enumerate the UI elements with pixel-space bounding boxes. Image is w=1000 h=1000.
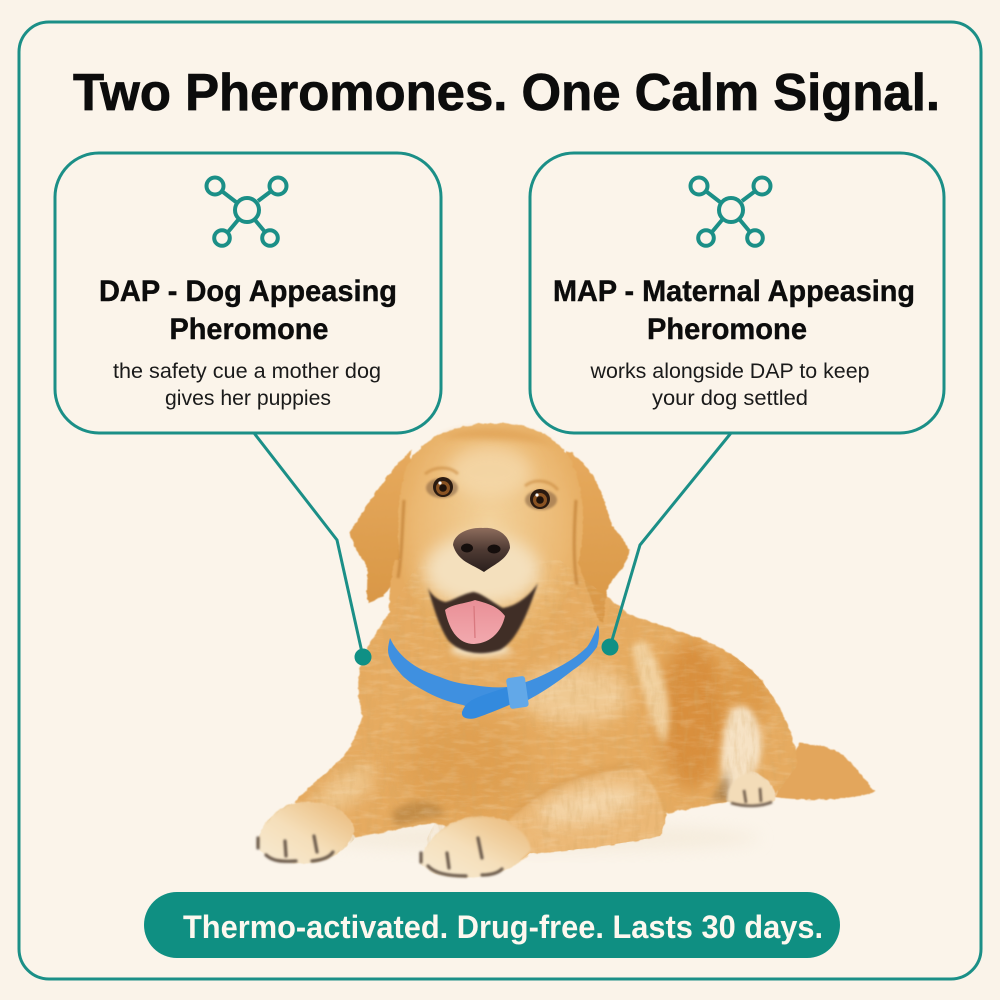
head — [398, 423, 583, 660]
rear paw redraw — [728, 773, 774, 805]
title: Two Pheromones. One Calm Signal. — [73, 64, 940, 122]
near leg — [505, 768, 665, 866]
rear leg shadow — [712, 770, 732, 802]
right eye — [525, 489, 557, 510]
near leg highlight — [536, 779, 644, 831]
floor shadow — [320, 824, 760, 852]
description: works alongside DAP to keep — [589, 360, 870, 383]
fur texture — [258, 618, 789, 874]
far leg highlight — [312, 762, 378, 814]
brows — [425, 468, 558, 490]
panel: MAP — [530, 153, 944, 433]
front left paw redraw — [258, 803, 353, 863]
heading: MAP - Maternal Appeasing — [553, 275, 915, 308]
rear paw toes — [731, 788, 772, 806]
heading: DAP - Dog Appeasing — [99, 275, 397, 308]
icon: molecule — [690, 178, 770, 246]
flank light patch — [721, 706, 762, 798]
heading: Pheromone — [647, 313, 807, 346]
banner — [144, 892, 840, 958]
front left paw — [257, 802, 354, 864]
tail — [775, 743, 875, 800]
muzzle — [424, 534, 540, 657]
right ear — [566, 450, 630, 623]
nostrils — [461, 544, 500, 554]
chest highlight — [520, 665, 630, 725]
collar strap end — [462, 686, 514, 719]
tongue groove — [474, 606, 475, 638]
body shading and fur — [258, 560, 795, 877]
neck ruff — [389, 560, 598, 686]
fur highlights — [296, 560, 795, 852]
fur-edged dog base — [257, 423, 875, 878]
nose — [453, 528, 510, 572]
heading: Pheromone — [170, 313, 328, 346]
front right paw — [420, 816, 532, 878]
leg gap shadow — [392, 801, 445, 826]
collar band — [388, 625, 599, 708]
front left claws — [258, 836, 333, 861]
front right paw redraw — [421, 817, 531, 877]
collar — [388, 625, 599, 719]
left ear — [350, 450, 412, 603]
description: gives her puppies — [165, 387, 331, 410]
panel: DAP — [55, 153, 441, 433]
mouth — [428, 583, 538, 653]
ear and head fold shadows — [398, 500, 577, 585]
shoulder light stripe — [632, 640, 670, 745]
banner: Thermo-activated. Drug-free. Lasts 30 days. — [183, 909, 823, 945]
rear paw — [726, 772, 775, 805]
illustration: golden retriever — [240, 423, 890, 890]
connector: MAP to collar — [602, 433, 731, 656]
near leg top shadow — [515, 766, 626, 815]
tongue — [445, 600, 505, 644]
forehead top shading — [440, 428, 555, 446]
description: your dog settled — [652, 387, 808, 410]
collar loop — [506, 676, 529, 709]
left eye — [426, 477, 458, 498]
body — [294, 560, 797, 853]
chest shading — [400, 717, 530, 813]
back orange — [719, 650, 771, 730]
connector: DAP to collar — [254, 433, 372, 666]
forehead highlight — [448, 446, 532, 498]
rear orange flank — [658, 641, 726, 789]
front right claws — [421, 838, 502, 876]
icon: molecule — [206, 178, 286, 246]
description: the safety cue a mother dog — [113, 360, 381, 383]
